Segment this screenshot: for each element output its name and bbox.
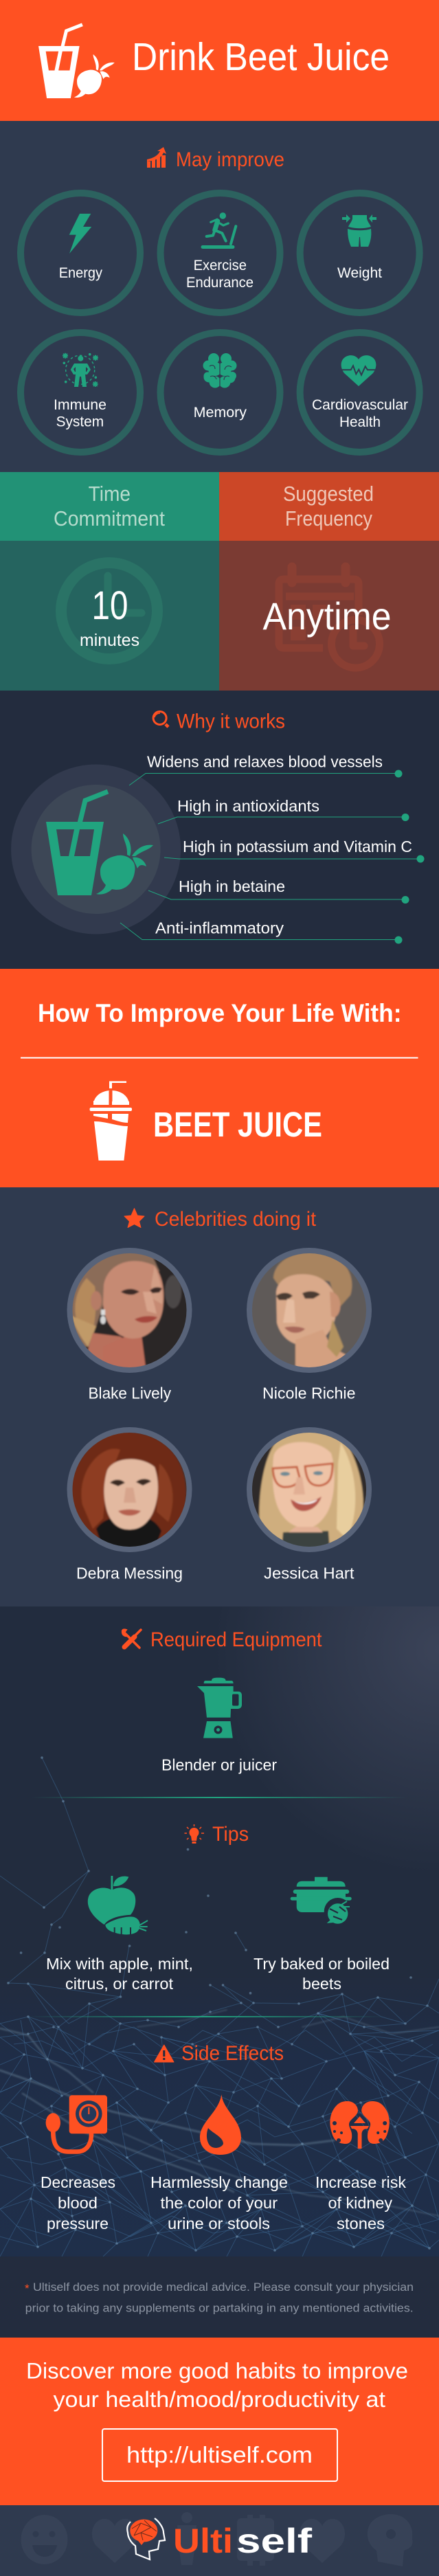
tip: baked or boiled	[254, 1955, 390, 1993]
icon: blood pressure monitor	[46, 2095, 107, 2152]
icon: star	[124, 1209, 144, 1227]
text: kidney stones	[315, 2173, 407, 2232]
panel: time commitment	[0, 472, 219, 691]
item: exercise endurance	[161, 193, 280, 313]
portrait: Nicole Richie	[247, 1248, 372, 1373]
name: Debra Messing: Debra Messing	[76, 1564, 183, 1582]
item: exercise endurance: Endurance	[186, 275, 254, 291]
logo: Ultiself: Ulti	[173, 2522, 233, 2560]
name: Blake Lively: Blake Lively	[88, 1384, 171, 1402]
heading: suggested frequency: Suggested	[283, 482, 374, 506]
icon: rising chart	[147, 147, 166, 168]
callout: anti-inflammatory: Anti-inflammatory	[155, 919, 284, 937]
panel: how to improve	[0, 969, 439, 1187]
text: decreases blood pressure: blood	[58, 2194, 98, 2212]
heading: suggested frequency: Frequency	[285, 506, 372, 530]
heading: celebrities doing it: Celebrities doing it	[155, 1208, 317, 1231]
panel: celebrities	[0, 1187, 439, 1606]
icon: drop	[200, 2094, 241, 2155]
callout: betaine: High in betaine	[179, 877, 285, 895]
text: kidney stones: Increase risk	[315, 2173, 407, 2191]
label: blender or juicer: Blender or juicer	[161, 1756, 277, 1773]
button: url: http://ultiself.com	[126, 2442, 313, 2467]
portrait: Blake Lively	[67, 1248, 192, 1374]
name: Jessica Hart: Jessica Hart	[264, 1564, 354, 1582]
icon: tools	[122, 1629, 141, 1648]
icon: juice glass and beet	[38, 25, 115, 98]
heading: time commitment: Commitment	[54, 506, 165, 530]
text: harmlessly change color: the color of your	[161, 2194, 278, 2212]
label: anytime: Anytime	[262, 594, 392, 638]
heading: suggested frequency	[283, 482, 374, 530]
button: url	[102, 2429, 337, 2481]
callout: antioxidants	[158, 797, 409, 824]
number: 10 minutes: minutes	[80, 631, 139, 650]
panel: equipment, tips and side effects	[0, 1606, 439, 2256]
panel: may improve	[0, 121, 439, 472]
icon: faint calendar with clock	[279, 567, 379, 668]
text: decreases blood pressure: Decreases	[41, 2173, 115, 2191]
item: energy: Energy	[59, 265, 102, 281]
callout: betaine	[148, 877, 409, 904]
text: harmlessly change color: urine or stools	[168, 2215, 270, 2232]
icon: faint clock	[61, 563, 157, 659]
text: kidney stones: stones	[337, 2215, 385, 2232]
callout: potassium: High in potassium and Vitamin C	[183, 838, 412, 855]
icon: takeaway cup	[90, 1082, 132, 1161]
panel: why it works	[0, 691, 439, 969]
tip: baked or boiled: Try baked or boiled	[254, 1955, 390, 1973]
panel: header	[0, 0, 439, 121]
item: immune system: System	[56, 414, 104, 430]
tip: mix with apple: Mix with apple, mint,	[46, 1955, 193, 1973]
callout: blood vessels: Widens and relaxes blood vessels	[147, 753, 383, 771]
item: weight: Weight	[337, 265, 382, 281]
icon: warning triangle	[154, 2045, 174, 2062]
heading: time commitment	[54, 482, 165, 530]
text: harmlessly change color: Harmlessly change	[150, 2173, 288, 2191]
panel: disclaimer: *	[25, 2282, 30, 2295]
item: exercise endurance: Exercise	[194, 258, 247, 273]
logo: Ultiself: self	[236, 2522, 312, 2560]
item: cardiovascular health: Cardiovascular	[312, 397, 408, 413]
logo: Ultiself	[127, 2518, 312, 2560]
panel: call to action	[0, 2338, 439, 2505]
callout: potassium	[164, 838, 425, 863]
text: decreases blood pressure	[41, 2173, 115, 2232]
icon: blender	[197, 1678, 242, 1738]
icon: apple and carrot	[88, 1876, 148, 1935]
title: Drink Beet Juice	[132, 35, 390, 79]
panel: suggested frequency	[219, 472, 439, 691]
icon: pot with beet	[291, 1877, 352, 1925]
callout: antioxidants: High in antioxidants	[177, 797, 319, 815]
item: memory	[161, 333, 280, 452]
graphic: concentric circles with juice icon	[11, 764, 181, 934]
item: energy	[21, 193, 140, 313]
text: discover more: Discover more good habits to improve	[26, 2359, 408, 2384]
portrait: Jessica Hart	[247, 1427, 372, 1552]
icon: kidneys	[330, 2101, 390, 2149]
heading: how to improve your life with: How To Improve Your Life With:	[38, 999, 401, 1027]
number: 10 minutes: 10	[92, 583, 128, 628]
heading: side effects: Side Effects	[181, 2042, 284, 2065]
tip: mix with apple	[46, 1955, 193, 1993]
portrait: Debra Messing	[67, 1427, 192, 1552]
text: kidney stones: of kidney	[328, 2194, 393, 2212]
item: cardiovascular health	[300, 333, 420, 452]
tip: baked or boiled: beets	[302, 1975, 341, 1993]
text: harmlessly change color	[150, 2173, 288, 2232]
name: Nicole Richie: Nicole Richie	[262, 1384, 356, 1402]
item: weight	[300, 193, 420, 313]
callout: blood vessels	[129, 753, 403, 785]
panel: disclaimer: Ultiself does not provide medical advice. Please consult your physician	[33, 2281, 414, 2294]
item: cardiovascular health: Health	[339, 414, 381, 430]
heading: time commitment: Time	[89, 482, 131, 506]
callout: anti-inflammatory	[120, 919, 403, 944]
icon: lightbulb	[184, 1824, 204, 1844]
heading: tips: Tips	[212, 1823, 249, 1846]
panel: footer	[0, 2505, 439, 2576]
text: discover more: your health/mood/productivity at	[54, 2387, 385, 2412]
item: memory: Memory	[194, 405, 247, 421]
panel: disclaimer: prior to taking any supplements or partaking in any mentioned activities.	[25, 2302, 414, 2314]
panel: disclaimer	[0, 2256, 439, 2338]
faint background icons	[21, 2512, 412, 2566]
text: discover more	[26, 2359, 408, 2412]
heading: required equipment: Required Equipment	[150, 1628, 322, 1651]
tip: mix with apple: citrus, or carrot	[65, 1975, 174, 1993]
item: immune system: Immune	[54, 397, 106, 413]
label: beet juice: BEET JUICE	[153, 1105, 322, 1144]
item: immune system	[21, 333, 140, 452]
number: 10 minutes	[80, 583, 139, 650]
heading: may improve: May improve	[176, 148, 284, 171]
icon: magnifier	[153, 712, 168, 727]
heading: why it works: Why it works	[177, 710, 285, 732]
text: decreases blood pressure: pressure	[47, 2215, 109, 2232]
